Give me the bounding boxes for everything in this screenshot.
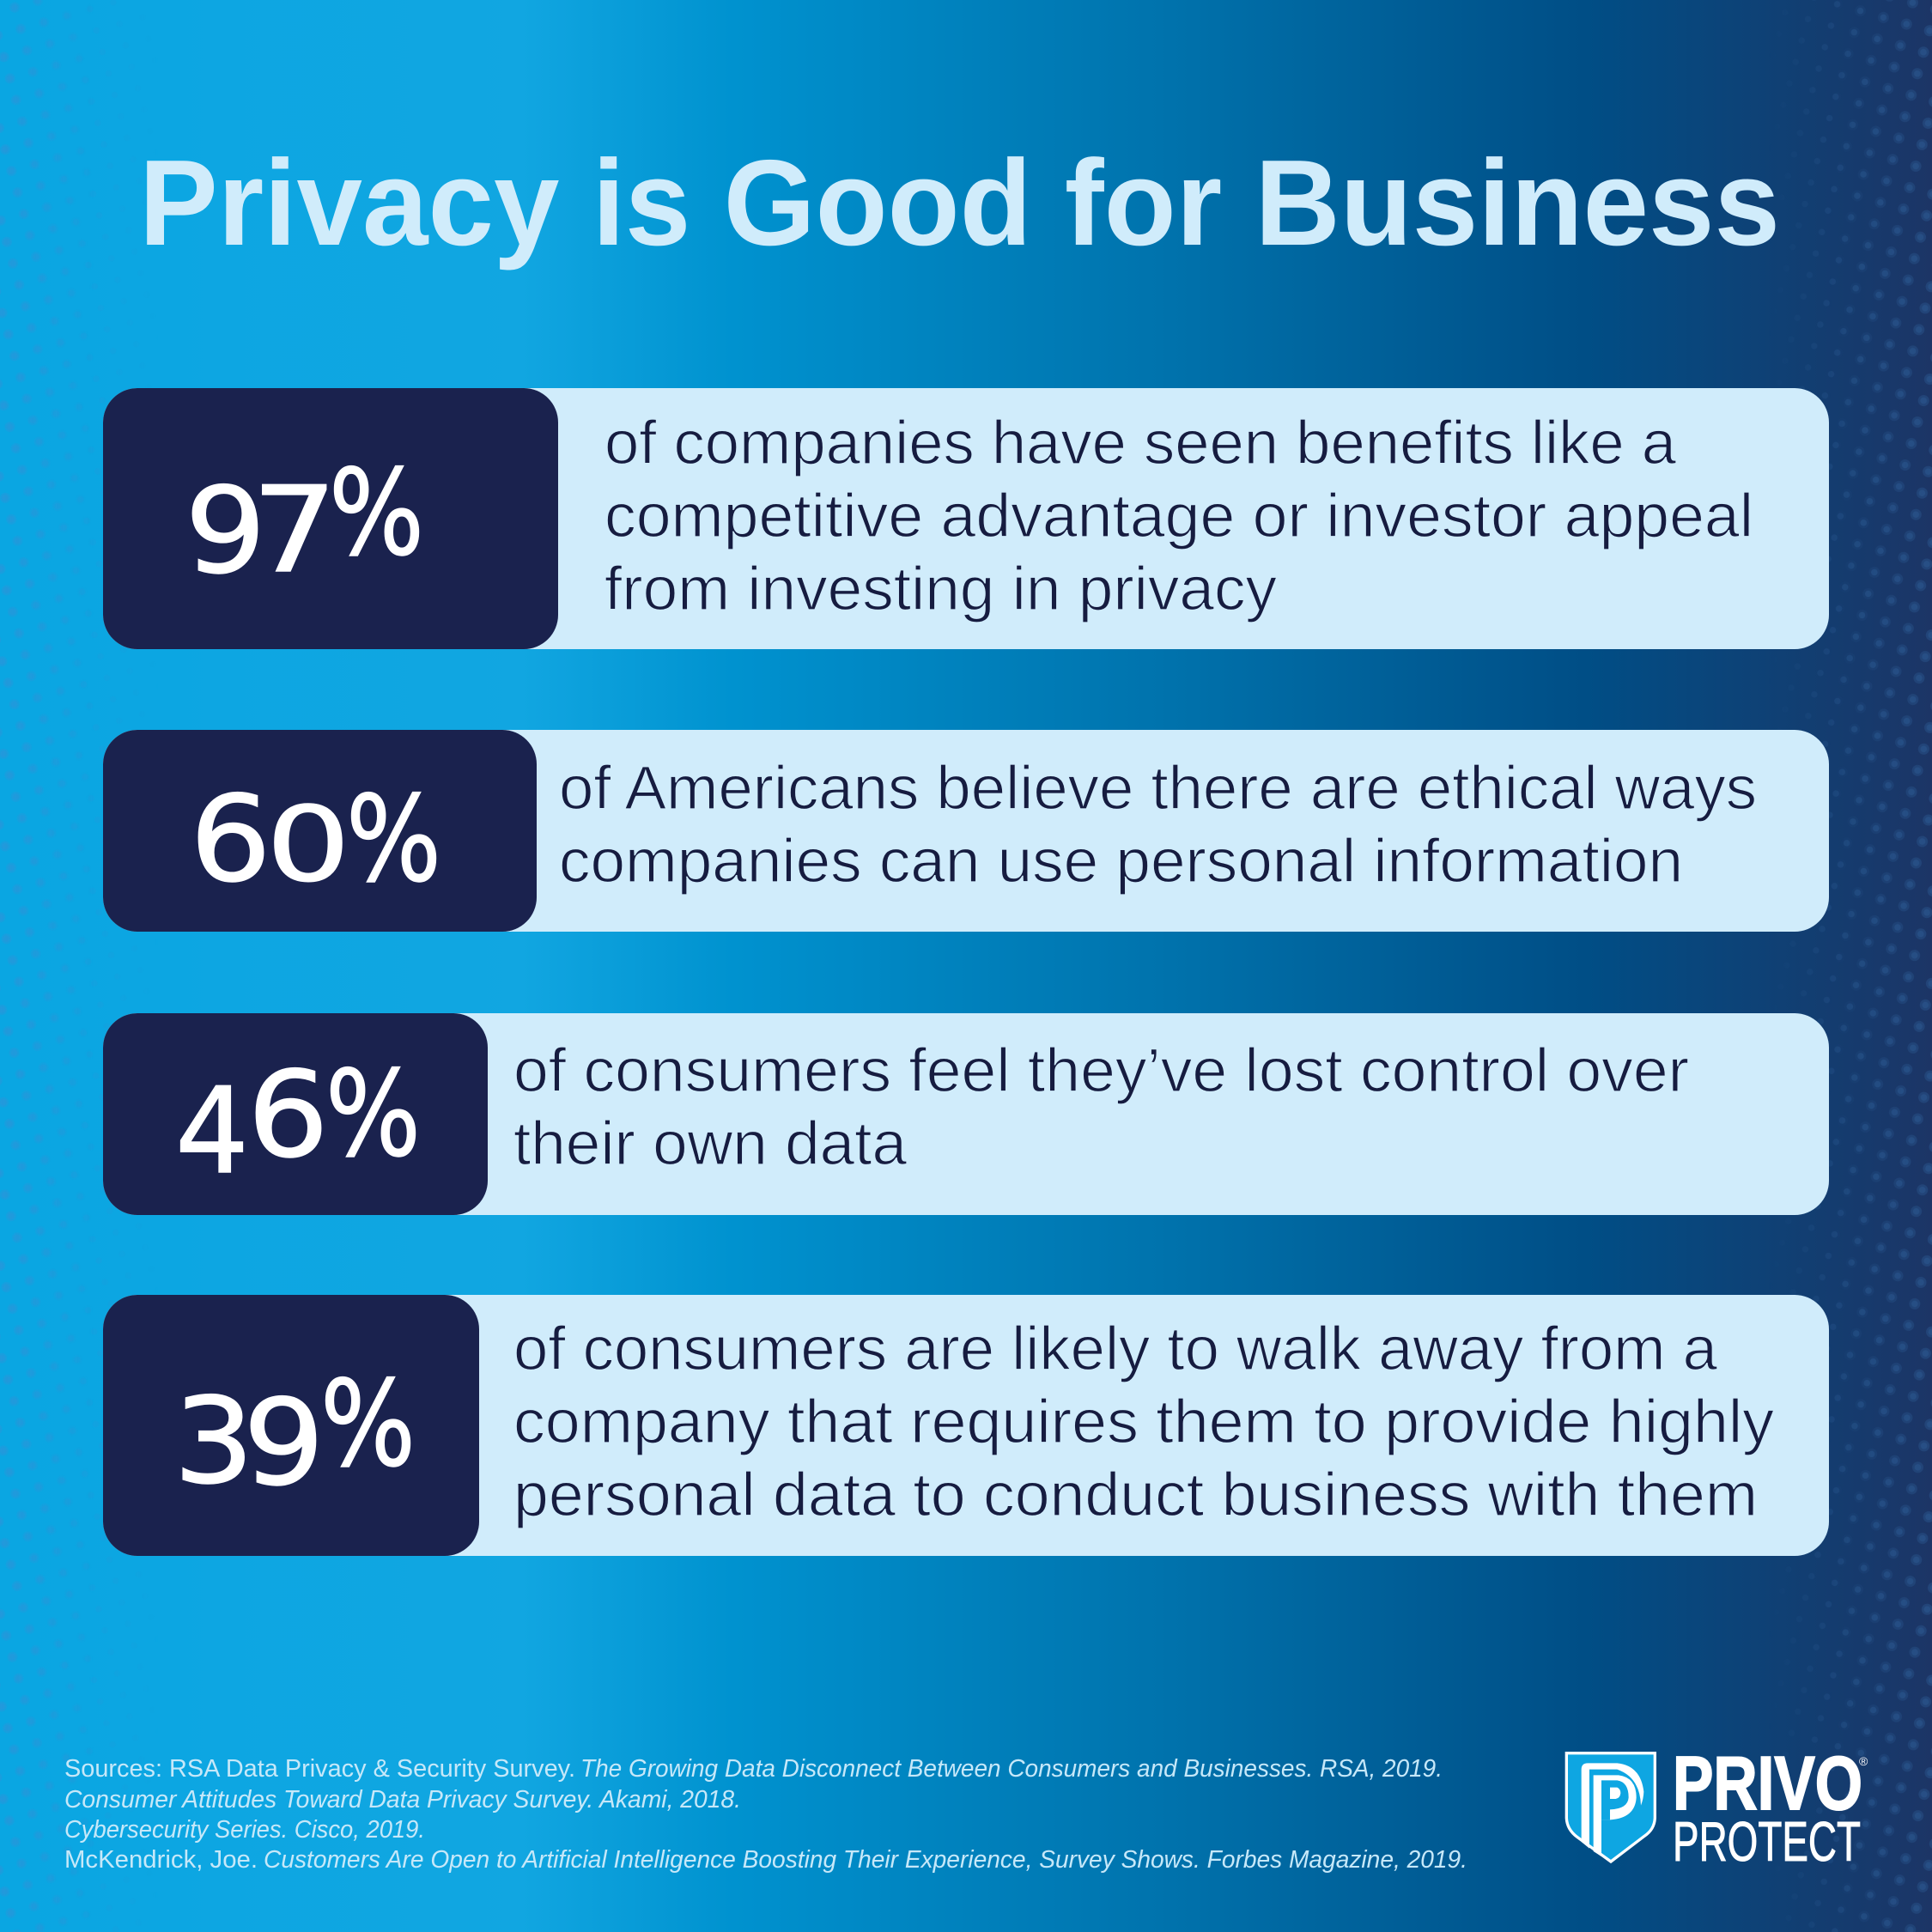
stat number: 97% (185, 444, 424, 600)
stat number: 60% (190, 770, 441, 908)
wordmark: ® (1859, 1754, 1868, 1768)
description: 39%: personal data to conduct business with them (513, 1461, 1758, 1529)
stat number: 60%: % (346, 770, 441, 908)
description: 97%: competitive advantage or investor appeal (605, 483, 1753, 550)
wordmark: PRIVO (1673, 1741, 1862, 1826)
description: 60%: of Americans believe there are ethical ways (559, 755, 1757, 823)
description: 60%: companies can use personal information (559, 828, 1683, 896)
stat number: 39%: 9 (243, 1374, 325, 1512)
panel: 46% stat (103, 1013, 1829, 1215)
stat number: 97%: % (329, 444, 424, 582)
stat number: 39%: 3 (173, 1372, 254, 1510)
sources: McKendrick, Joe. (64, 1846, 258, 1874)
icon: shield (1566, 1753, 1655, 1862)
description: 97%: from investing in privacy (605, 556, 1278, 623)
description: 97%: of companies have seen benefits like a (605, 410, 1677, 477)
description: 46%: of consumers feel they’ve lost control over (513, 1037, 1689, 1105)
logo: Privo Protect (1566, 1741, 1868, 1873)
stat number: 46%: 4 (175, 1062, 249, 1200)
stat number: 46% (175, 1045, 421, 1200)
description: 39% (513, 1315, 1775, 1529)
description: 97% (605, 410, 1753, 623)
description: 46% (513, 1037, 1689, 1178)
stat number: 39% (173, 1355, 416, 1512)
wordmark: PROTECT (1673, 1810, 1861, 1873)
sources: Consumer Attitudes Toward Data Privacy Survey. Akami, 2018. (64, 1786, 741, 1814)
description: 39%: company that requires them to provide highly (513, 1388, 1775, 1456)
description: 60% (559, 755, 1757, 896)
sources: Customers Are Open to Artificial Intelligence Boosting Their Experience, Survey Shows. Forbes Magazine, 2019. (264, 1846, 1467, 1874)
title: Privacy is Good for Business (139, 135, 1780, 271)
description: 46%: their own data (513, 1110, 908, 1178)
stat number: 60%: 0 (266, 786, 350, 905)
sources (64, 1755, 1467, 1874)
stat number: 97%: 7 (252, 461, 337, 599)
stat number: 39%: % (320, 1355, 416, 1493)
stat number: 60%: 6 (190, 770, 271, 908)
stat number: 97%: 9 (185, 462, 266, 600)
stat number: 46%: % (325, 1045, 421, 1183)
sources: Sources: RSA Data Privacy & Security Survey. (64, 1755, 575, 1783)
sources: The Growing Data Disconnect Between Consumers and Businesses. RSA, 2019. (580, 1755, 1443, 1783)
description: 39%: of consumers are likely to walk away from a (513, 1315, 1718, 1383)
panel: 60% stat (103, 730, 1829, 932)
sources: Cybersecurity Series. Cisco, 2019. (64, 1816, 425, 1844)
panel: 97% stat (103, 388, 1829, 649)
wordmark (1673, 1741, 1868, 1873)
panel: 39% stat (103, 1295, 1829, 1556)
stat number: 46%: 6 (247, 1046, 329, 1184)
